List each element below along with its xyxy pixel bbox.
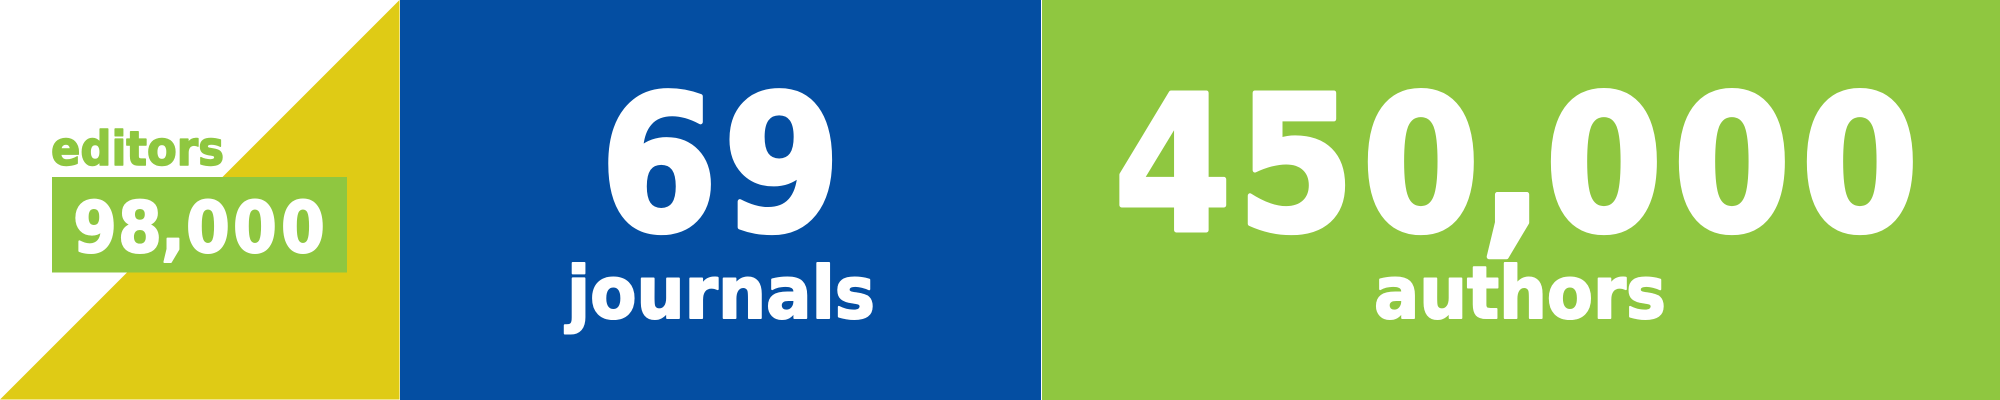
panel: authors (1042, 0, 2000, 400)
label: authors: authors (1374, 251, 1666, 335)
panel: journals (400, 0, 1041, 400)
number: 450,000: 450,000 (1114, 57, 1919, 275)
label: editors: editors (51, 122, 224, 177)
blue background (400, 0, 1041, 400)
number: 69: 69 (600, 57, 841, 275)
yellow triangle background (0, 0, 400, 400)
green background (1042, 0, 2000, 400)
green number box (52, 177, 347, 272)
label: journals: journals (564, 251, 875, 335)
number: 98,000: 98,000 (73, 187, 325, 269)
panel: editors (0, 0, 400, 400)
